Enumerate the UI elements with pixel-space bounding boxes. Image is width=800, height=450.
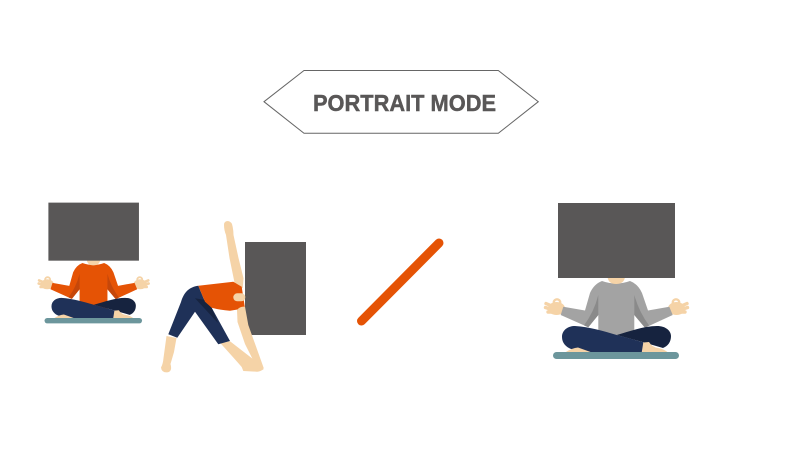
sleeve shadows bbox=[584, 295, 649, 328]
covered face block bbox=[558, 203, 675, 278]
hands bbox=[39, 277, 149, 289]
sweater bbox=[561, 281, 673, 345]
raised arm bbox=[224, 221, 244, 288]
sleeve shadows bbox=[69, 274, 119, 299]
lowered arm bbox=[237, 307, 264, 369]
bent hand bbox=[233, 293, 245, 301]
neck bbox=[87, 260, 100, 265]
title banner bbox=[264, 70, 538, 133]
lower leg, back bbox=[161, 336, 176, 372]
figure: side-bending person bbox=[161, 221, 306, 372]
legs bbox=[617, 326, 671, 348]
lower leg and foot, front bbox=[220, 341, 264, 372]
covered face block bbox=[48, 203, 139, 261]
mat bbox=[553, 352, 679, 359]
slash divider bbox=[362, 243, 439, 321]
neck bbox=[608, 277, 625, 284]
mat bbox=[45, 318, 142, 323]
covered face block bbox=[245, 242, 306, 335]
legs bbox=[94, 298, 136, 315]
figure: large seated person in grey bbox=[546, 203, 688, 359]
title banner: PORTRAIT MODE bbox=[313, 90, 496, 116]
feet bbox=[54, 310, 134, 318]
feet bbox=[565, 342, 668, 352]
shirt bbox=[198, 282, 245, 311]
leggings bbox=[168, 286, 230, 344]
sweater bbox=[50, 263, 137, 313]
figure: small seated person in orange bbox=[39, 203, 149, 323]
hands bbox=[546, 299, 688, 315]
